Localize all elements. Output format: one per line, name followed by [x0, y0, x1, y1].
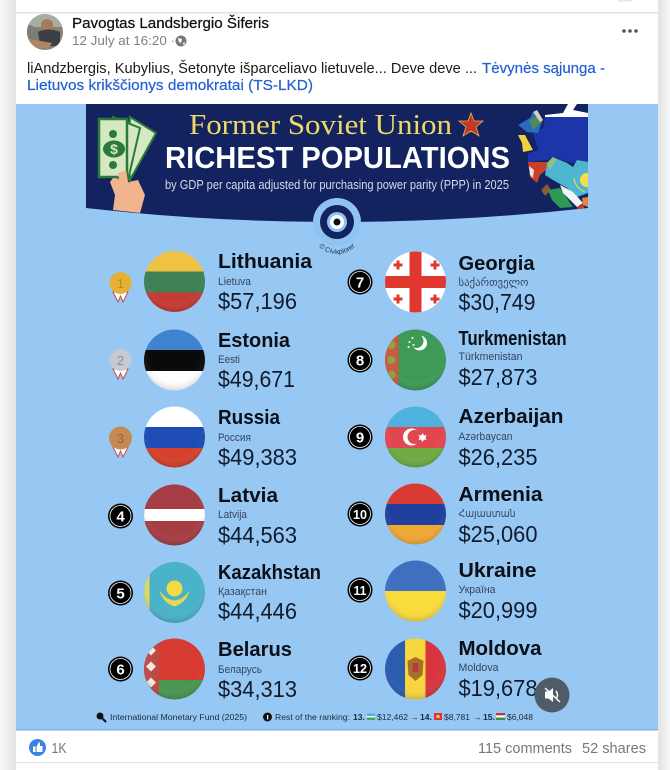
- row 12: Moldova: [348, 638, 542, 701]
- flag: Ukraine: [384, 560, 446, 622]
- row 10: Armenia: [348, 483, 543, 547]
- Belarus text: [218, 639, 297, 702]
- Armenia text: Armenia: [458, 484, 543, 506]
- author name: Pavogtas Landsbergio Šiferis: [72, 15, 269, 32]
- ranking text: 14.: [420, 712, 432, 722]
- row 7: Georgia: [348, 251, 536, 315]
- badge: 4: 4: [116, 508, 125, 526]
- banner headline: RICHEST POPULATIONS: [165, 141, 510, 175]
- ranking text: →: [410, 712, 419, 722]
- post text: Tėvynės sąjunga -: [482, 61, 605, 77]
- Russia text: Russia: [218, 407, 281, 429]
- Moldova text: [458, 638, 542, 701]
- reactions footer: [16, 729, 658, 763]
- flag: Russia: [144, 406, 206, 469]
- badge: 12: [348, 656, 372, 680]
- post date: 12 July at 16:20 ·: [72, 34, 175, 48]
- ranking text: Rest of the ranking:: [275, 712, 350, 722]
- shares count: 52 shares: [582, 740, 646, 757]
- Kazakhstan text: Қазақстан: [218, 586, 267, 598]
- Estonia text: Estonia: [218, 330, 291, 352]
- icon: magnifier: [96, 712, 106, 722]
- medal: silver: [110, 349, 132, 379]
- Russia text: $49,383: [218, 444, 297, 470]
- banner subtitle: by GDP per capita adjusted for purchasing power parity (PPP) in 2025: [165, 177, 509, 192]
- ranking text: 15.: [483, 712, 495, 722]
- row 8: Turkmenistan: [348, 328, 566, 391]
- medal: bronze: 3: [117, 431, 124, 446]
- Kazakhstan text: $44,446: [218, 598, 297, 624]
- Turkmenistan text: Türkmenistan: [458, 351, 522, 363]
- Belarus text: Беларусь: [218, 664, 262, 676]
- flag: Lithuania: [144, 250, 206, 314]
- badge: 12: 12: [353, 661, 367, 676]
- Azerbaijan text: [458, 406, 564, 470]
- post text: [27, 60, 605, 94]
- Armenia text: $25,060: [458, 521, 538, 547]
- Ukraine text: Ukraine: [458, 560, 536, 582]
- logo: eye: © Civixplorer: [320, 244, 354, 256]
- flag: Latvia: [144, 484, 206, 546]
- comments count: 115 comments: [478, 740, 572, 757]
- flag: Armenia: [384, 483, 446, 546]
- Turkmenistan text: [458, 328, 566, 390]
- left column: [108, 250, 321, 702]
- icon: info: [263, 712, 272, 722]
- Moldova text: Moldova: [458, 638, 542, 660]
- logo: eye: [313, 198, 361, 256]
- Russia text: Россия: [218, 432, 251, 444]
- ranking text: $8,781: [444, 712, 470, 722]
- row 11: Ukraine: [348, 560, 538, 623]
- badge: 10: 10: [353, 507, 367, 522]
- right column: [348, 251, 566, 701]
- source and rest of ranking: [96, 712, 533, 722]
- Belarus text: Belarus: [218, 639, 292, 661]
- badge: 7: 7: [356, 274, 364, 292]
- badge: 8: [348, 348, 372, 372]
- Moldova text: $19,678: [458, 675, 538, 701]
- infographic panel: [16, 104, 658, 729]
- Kazakhstan text: Kazakhstan: [218, 562, 321, 584]
- flag: Moldova: [384, 638, 446, 700]
- icon: like: [29, 739, 46, 756]
- post text: liAndzbergis, Kubylius, Šetonyte išparceliavo lietuvele... Deve deve ...: [27, 60, 477, 77]
- Ukraine text: Україна: [458, 584, 496, 596]
- badge: 8: 8: [356, 352, 364, 370]
- Estonia text: $49,671: [218, 366, 295, 392]
- badge: 11: [348, 578, 372, 602]
- mute button: [534, 678, 570, 712]
- Georgia text: [458, 253, 536, 315]
- row 3: Russia: [109, 406, 297, 470]
- Latvia text: [218, 485, 297, 548]
- badge: 7: [348, 270, 372, 294]
- flag: Kazakhstan: [144, 562, 206, 624]
- icon: globe: [176, 36, 186, 46]
- Lithuania text: Lietuva: [218, 276, 252, 288]
- row 2: Estonia: [110, 329, 295, 392]
- Armenia text: [458, 484, 543, 547]
- banner: [86, 104, 594, 222]
- Azerbaijan text: Azərbaycan: [458, 431, 512, 443]
- Georgia text: საქართველო: [458, 277, 529, 289]
- icon: money in hand: [99, 117, 156, 213]
- Azerbaijan text: Azerbaijan: [458, 406, 564, 428]
- Latvia text: Latvia: [218, 485, 279, 507]
- ranking text: $12,462: [377, 712, 408, 722]
- Estonia text: Eesti: [218, 354, 240, 366]
- Lithuania text: $57,196: [218, 288, 297, 314]
- badge: 5: [108, 580, 133, 606]
- medal: gold: 1: [117, 276, 124, 291]
- row 9: Azerbaijan: [348, 406, 564, 470]
- ranking text: [275, 712, 533, 722]
- Estonia text: [218, 330, 295, 392]
- source text: International Monetary Fund (2025): [110, 712, 247, 722]
- badge: 6: 6: [116, 662, 125, 678]
- Ukraine text: [458, 560, 538, 623]
- Turkmenistan text: $27,873: [458, 364, 538, 390]
- icon: money in hand: $: [110, 141, 118, 157]
- Ukraine text: $20,999: [458, 597, 538, 623]
- badge: 5: 5: [116, 586, 125, 602]
- row 5: Kazakhstan: [108, 562, 321, 624]
- badge: 9: 9: [356, 430, 364, 446]
- ranking text: 13.: [353, 712, 365, 722]
- badge: 11: 11: [354, 583, 366, 598]
- flag: Belarus: [144, 638, 206, 701]
- flag: Turkmenistan: [384, 329, 446, 391]
- ranking text: →: [473, 712, 482, 722]
- Armenia text: Հայաստան: [458, 508, 516, 520]
- Russia text: [218, 407, 297, 470]
- badge: 6: [108, 656, 133, 682]
- Latvia text: $44,563: [218, 522, 297, 548]
- like count: 1K: [52, 740, 66, 757]
- Moldova text: Moldova: [458, 662, 499, 674]
- avatar: [27, 14, 63, 50]
- medal: gold: [110, 272, 132, 302]
- Kazakhstan text: [218, 562, 321, 624]
- post text: Lietuvos krikščionys demokratai (TS-LKD): [27, 78, 313, 94]
- flag: Estonia: [144, 329, 206, 392]
- badge: 10: [348, 502, 372, 526]
- Latvia text: Latvija: [218, 509, 248, 521]
- Belarus text: $34,313: [218, 676, 297, 702]
- banner title: Former Soviet Union: [189, 109, 453, 141]
- row 1: Lithuania: [110, 250, 313, 314]
- map of former USSR flags: [518, 104, 588, 210]
- Georgia text: Georgia: [458, 253, 535, 275]
- Azerbaijan text: $26,235: [458, 444, 538, 470]
- badge: 9: [348, 424, 372, 450]
- Turkmenistan text: Turkmenistan: [458, 328, 566, 350]
- ranking text: $6,048: [507, 712, 533, 722]
- flag: Georgia: [384, 251, 446, 313]
- badge: 4: [108, 504, 133, 528]
- row 4: Latvia: [108, 484, 297, 548]
- Georgia text: $30,749: [458, 289, 536, 315]
- flag: Azerbaijan: [384, 406, 446, 469]
- icon: red star: [459, 113, 483, 136]
- Lithuania text: Lithuania: [218, 251, 313, 273]
- medal: bronze: [109, 426, 132, 457]
- Lithuania text: [218, 251, 313, 314]
- more options: [622, 29, 638, 33]
- row 6: Belarus: [108, 638, 297, 702]
- medal: silver: 2: [117, 353, 124, 368]
